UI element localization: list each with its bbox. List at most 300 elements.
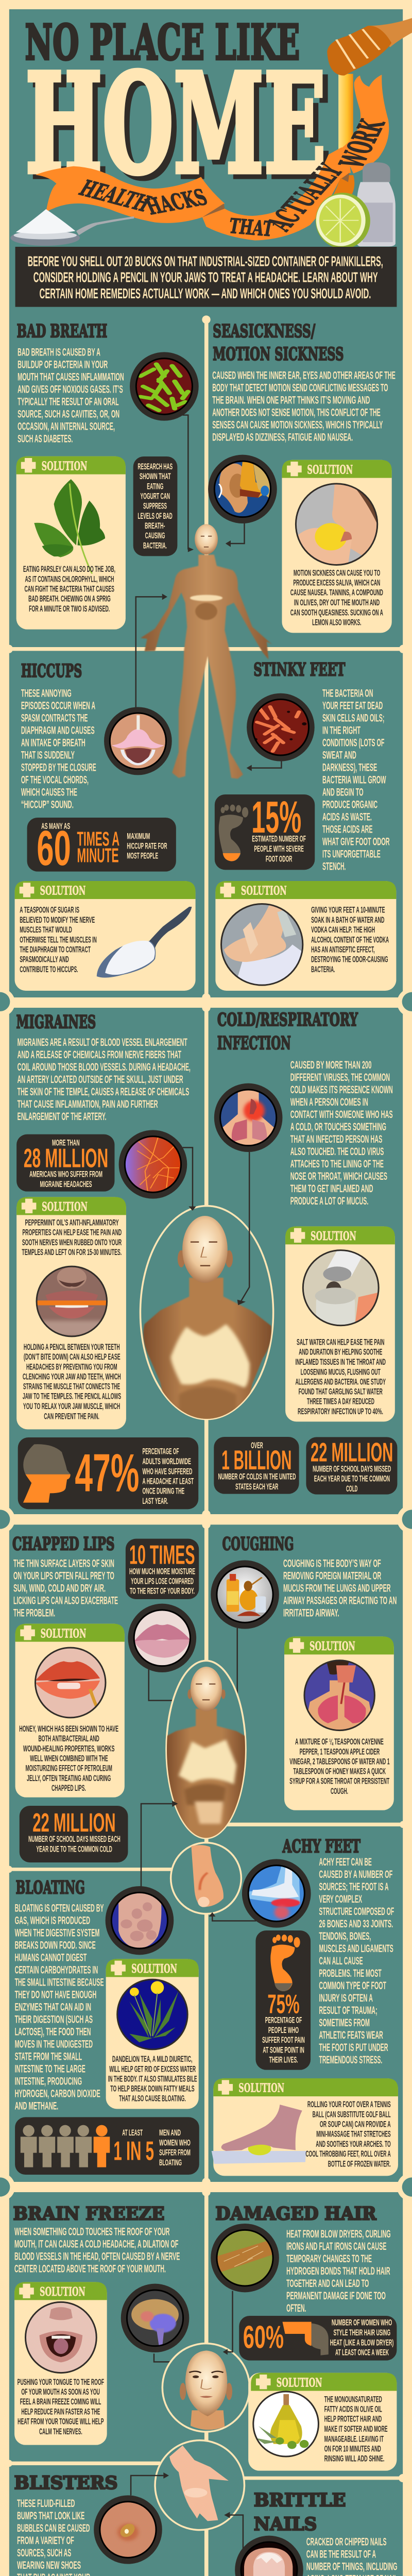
stat: 15 percent foot odor <box>215 792 315 870</box>
icon: diaphragm circle <box>104 707 172 775</box>
heading: cold/respiratory infection <box>217 1009 358 1054</box>
panel: bloating: BLOATING IS OFTEN CAUSED BY <box>15 1902 104 1914</box>
icon: damaged hair strand circle <box>211 2224 279 2292</box>
icon: brain circle <box>121 2284 189 2352</box>
photo: dandelion <box>117 1979 187 2049</box>
illustration: honey stream <box>334 74 354 194</box>
ribbon: health hacks that actually work <box>36 75 392 241</box>
body figure: head and torso with lungs <box>140 1206 273 1420</box>
panel: hiccups: HICCUPS <box>21 660 82 682</box>
panel: hiccups: HICCUP RATE FOR <box>127 841 167 851</box>
panel: migraines: WHO HAVE SUFFERED <box>143 1467 192 1476</box>
text: chapped lips causes <box>13 1557 118 1619</box>
photo: olive oil bottle <box>253 2392 318 2456</box>
heading: seasickness / motion sickness <box>213 321 344 365</box>
solution card: parsley: SOLUTION <box>42 459 87 473</box>
panel: chapped lips: JELLY, OFTEN TREATING AND CURING <box>27 1773 111 1783</box>
body figure: hand in circle <box>155 2441 244 2530</box>
stat: 60 percent: 60% <box>243 2319 284 2355</box>
stat: 22 million school days bottom <box>20 1806 128 1862</box>
text: salt water solution <box>295 1337 386 1416</box>
panel: brain freeze: FEEL A BRAIN FREEZE COMING WILL <box>20 2397 101 2406</box>
ribbon: health hacks that actually work: ACTUALLY <box>260 160 350 235</box>
panel: chapped lips: BOTH ANTIBACTERIAL AND <box>38 1734 99 1743</box>
section separators <box>0 645 412 2576</box>
connector arrow: cold to chest <box>237 1152 249 1305</box>
text: chapped lips causes: THE PROBLEM. <box>13 1606 55 1619</box>
panel: migraines: PERCENTAGE OF <box>143 1447 179 1456</box>
solution card: vodka foot soak <box>215 881 396 991</box>
stat: 22 million school days <box>306 1437 397 1495</box>
panel: bad breath: YOGURT CAN <box>140 492 170 501</box>
panel: coughing <box>211 1534 397 1810</box>
callout: yogurt research: BREATH- <box>145 521 165 531</box>
ribbon: health hacks that actually work: WORK <box>332 116 392 171</box>
stat: 1 billion: OVER <box>251 1440 263 1450</box>
panel: migraines: SOOTH NERVES WHEN RUBBED ONTO YOUR <box>22 1238 122 1247</box>
stat: 1 in 5: AT LEAST <box>122 2128 143 2138</box>
text: tongue solution: CALM THE NERVES. <box>39 2427 82 2436</box>
text: blisters causes <box>17 2497 91 2576</box>
text: tennis ball solution <box>305 2099 391 2168</box>
panel: migraines: AMERICANS WHO SUFFER FROM <box>29 1170 102 1179</box>
icon: hair dryer head <box>282 2322 329 2355</box>
panel: blisters: FROM A VARIETY OF <box>17 2534 74 2547</box>
panel: chapped lips: MOISTURIZING EFFECT OF PETROLEUM <box>25 1764 112 1773</box>
panel: bad breath: BACTERIA. <box>143 541 167 550</box>
text: coughing causes <box>283 1557 397 1619</box>
panel: bad breath: TYPICALLY THE RESULT OF AN ORAL <box>18 395 119 408</box>
panel: bloating: INTESTINE TO THE LARGE <box>15 2062 85 2075</box>
panel: bad breath: CAN FIGHT THE BACTERIA THAT CAUSES <box>24 584 114 594</box>
text: parsley solution <box>23 564 115 614</box>
icon: five people <box>21 2125 110 2167</box>
solution card: honey and petroleum jelly: SOLUTION <box>41 1626 86 1641</box>
panel: brain freeze: OF YOUR MOUTH AS SOON AS YOU <box>21 2387 100 2397</box>
text: stinky feet causes: STENCH. <box>322 860 346 872</box>
connector arrow: cough to chest <box>226 1628 237 1729</box>
callout: yogurt research <box>133 456 177 556</box>
solution card: sugar: CONTRIBUTE TO HICCUPS. <box>20 964 78 974</box>
text: honey solution <box>19 1724 118 1793</box>
stat: 1 in 5: BLOATING <box>159 2158 182 2167</box>
solution card: dandelion tea <box>106 1959 199 2109</box>
panel: cold and respiratory infection: STATES EACH YEAR <box>235 1482 278 1492</box>
panel: hiccups: SPASM CONTRACTS THE <box>21 711 88 724</box>
solution card: dandelion tea: SOLUTION <box>131 1961 177 1976</box>
connector arrow: ear to head <box>226 523 244 547</box>
panel: blisters: BUMPS THAT LOOK LIKE <box>17 2510 84 2522</box>
stat: 75 percent <box>255 1930 311 2070</box>
solution card: sugar <box>15 881 196 991</box>
stat: 75 percent: 75% <box>267 1989 300 2019</box>
panel: migraines: HEADACHES BY PREVENTING YOU FROM <box>26 1362 117 1371</box>
panel: bloating: WHEN THE DIGESTIVE SYSTEM <box>15 1926 99 1939</box>
panel: migraines: PEPPERMINT OIL’S ANTI-INFLAMMATORY <box>25 1218 119 1227</box>
panel: bloating: CERTAIN CARBOHYDRATES IN <box>15 1963 98 1976</box>
solution card: tennis ball: SOLUTION <box>238 2081 284 2095</box>
text: TO HELP BREAK DOWN FATTY MEALS <box>110 2084 195 2094</box>
text: brain freeze causes <box>14 2225 180 2275</box>
icon: nail circle <box>235 2536 303 2576</box>
panel: brain freeze: HELP REDUCE PAIN FASTER AS THE <box>21 2407 100 2416</box>
panel: chapped lips: WELL WHEN COMBINED WITH THE <box>30 1754 108 1763</box>
stat: 60 times a minute: TIMES A <box>77 828 119 850</box>
panel: chapped lips: SUN, WIND, COLD AND DRY AIR. <box>13 1582 106 1594</box>
solution card: sugar: A TEASPOON OF SUGAR IS <box>20 905 79 915</box>
timeline top node <box>202 315 211 324</box>
solution card: honey and petroleum jelly <box>15 1624 125 1798</box>
panel: bloating: THEY DO NOT HAVE ENOUGH <box>15 1988 96 2001</box>
heading: cold/respiratory infection: INFECTION <box>217 1033 291 1054</box>
heading: brittle nails <box>254 2490 346 2535</box>
stat: 60 times a minute: 60 <box>37 821 71 876</box>
panel: bloating: GAS, WHICH IS PRODUCED <box>15 1914 90 1926</box>
icon: footprint <box>219 805 248 861</box>
solution card: pencil: CAN PREVENT THE PAIN. <box>44 1412 99 1421</box>
text: YOUR LIPS LOSE COMPARED <box>131 1577 194 1586</box>
text: motion sickness causes <box>212 369 396 443</box>
heading: brittle nails: NAILS <box>254 2514 317 2535</box>
panel: chapped lips: ON YOUR LIPS OFTEN FALL PREY TO <box>13 1569 114 1582</box>
stat: 47 percent: LAST YEAR. <box>143 1496 168 1506</box>
photo: pencil between teeth <box>37 1266 107 1336</box>
panel: hiccups: THAT IS SUDDENLY <box>21 749 75 761</box>
connector arrow: bloating to abdomen <box>141 1801 178 1887</box>
text: dandelion solution <box>108 2054 197 2104</box>
text: 10 TIMES <box>129 1540 195 1570</box>
solution card: tongue: SOLUTION <box>40 2284 85 2299</box>
panel: migraines: ADULTS WORLDWIDE <box>143 1456 191 1466</box>
panel: bloating: THE SMALL INTESTINE BECAUSE <box>15 1976 104 1988</box>
icon: blood vessels circle <box>119 1130 187 1199</box>
text: stinky feet causes <box>322 687 390 872</box>
text: damaged hair causes: OFTEN. <box>286 2302 306 2314</box>
photo: foot soak <box>221 904 303 985</box>
stat: 1 in 5: 1 IN 5 <box>113 2136 154 2166</box>
stat: 1 in 5: MEN AND <box>159 2128 181 2138</box>
panel: bloating: MOVES IN THE UNDIGESTED <box>15 2038 93 2050</box>
illustration: salt shaker <box>357 162 396 246</box>
text: pencil solution <box>23 1342 121 1421</box>
panel: achy feet: SUFFER FOOT PAIN <box>262 2035 305 2045</box>
stat: 28 million <box>16 1134 114 1192</box>
connector arrow: bad breath to head <box>183 415 194 552</box>
ribbon: health hacks that actually work: HEALTH <box>75 175 156 216</box>
panel: bad breath: RESEARCH HAS <box>138 462 173 471</box>
title: no place like home <box>10 14 412 249</box>
text: hiccups causes <box>21 687 96 810</box>
text: peppermint oil <box>22 1218 122 1257</box>
panel: chapped lips: 22 MILLION <box>32 1808 115 1837</box>
solution card: sugar: MUSCLES THAT WOULD <box>20 925 72 935</box>
panel: bad breath: BAD BREATH. CHEWING ON A SPRIG <box>28 594 111 604</box>
panel: bloating: HYDROGEN, CARBON DIOXIDE <box>15 2087 100 2099</box>
intro banner <box>15 247 397 307</box>
icon: inner ear circle <box>208 455 277 523</box>
solution card: sugar: SOLUTION <box>40 884 85 898</box>
panel: bloating: STATE FROM THE SMALL <box>15 2050 82 2062</box>
panel: damaged hair <box>211 2204 397 2471</box>
panel: blisters <box>14 2472 196 2576</box>
panel: bad breath: MOUTH THAT CAUSES INFLAMMATION <box>18 370 124 383</box>
photo: honey on lips <box>35 1648 106 1718</box>
text: hiccups causes: “HICCUP” SOUND. <box>21 798 74 810</box>
panel: bad breath <box>16 321 199 630</box>
icon: cough remedy ingredients circle <box>211 1560 279 1629</box>
central timeline spine <box>204 319 209 2576</box>
solution card: lemon <box>282 460 392 633</box>
panel: hiccups: OF THE VOCAL CHORDS, <box>21 773 89 786</box>
panel: stinky feet: ESTIMATED NUMBER OF <box>252 834 306 844</box>
panel: hiccups: AN INTAKE OF BREATH <box>21 736 85 749</box>
panel: bad breath: EATING PARSLEY CAN ALSO DO THE JOB, <box>23 564 115 574</box>
panel: blisters: SOURCES, SUCH AS <box>17 2547 71 2559</box>
solution card: pencil: SOLUTION <box>42 1199 88 1214</box>
body figure: upper body with abdomen <box>166 1660 246 1839</box>
text: migraine causes <box>18 1036 191 1123</box>
text: vodka solution: BACTERIA. <box>311 964 335 974</box>
solution card: sugar: BELIEVED TO MODIFY THE NERVE <box>20 915 95 925</box>
connector arrow: blisters to hand <box>131 2472 169 2495</box>
panel: bad breath: SUPPRESS <box>143 501 167 511</box>
panel: migraines: 28 MILLION <box>24 1143 108 1173</box>
text: hiccups causes: THESE ANNOYING <box>21 687 72 699</box>
panel: bad breath: OCCASION, AN INTERNAL SOURCE, <box>18 420 115 432</box>
text: HOW MUCH MORE MOISTURE <box>129 1567 195 1576</box>
body figure: foot in circle <box>171 1843 241 1914</box>
panel: migraines: A HEADACHE AT LEAST <box>143 1477 194 1486</box>
stat: 10 times <box>126 1539 199 1599</box>
panel: migraines: MIGRAINES <box>16 1012 96 1032</box>
text: migraine causes: ENLARGEMENT OF THE ARTERY. <box>18 1110 107 1123</box>
solution card: sugar: THE DIAPHRAGM TO CONTRACT <box>20 945 91 955</box>
text: honey solution: CHAPPED LIPS. <box>52 1783 86 1793</box>
panel: bad breath: AND GIVES OFF NOXIOUS GASES. IT’S <box>18 383 123 395</box>
panel: achy feet: AT SOME POINT IN <box>263 2045 304 2055</box>
panel: chapped lips: YEAR DUE TO THE COMMON COLD <box>36 1844 112 1854</box>
photo: open mouth <box>25 2302 96 2373</box>
panel: bloating <box>15 1801 199 2175</box>
panel: bloating: BREAKS DOWN FOOD. SINCE <box>15 1939 96 1951</box>
icon: blister circle <box>94 2495 162 2564</box>
text: bloating causes: AND METHANE. <box>15 2099 58 2112</box>
stat: 1 in 5 <box>15 2117 199 2175</box>
stat: 60 times a minute: AS MANY AS <box>41 821 70 831</box>
connector arrow: nails to hand <box>224 2512 243 2562</box>
text: IN THE BODY. IT ALSO STIMULATES BILE <box>108 2074 197 2084</box>
panel: chapped lips: WOUND-HEALING PROPERTIES, WORKS <box>23 1744 114 1753</box>
panel: brain freeze: HEAT FROM YOUR TONGUE WILL HELP <box>18 2417 104 2427</box>
solution card: tongue <box>14 2282 107 2445</box>
panel: blisters: WEARING NEW SHOES <box>17 2559 81 2571</box>
panel: chapped lips: HONEY, WHICH HAS BEEN SHOWN TO HAVE <box>19 1724 118 1734</box>
text: brittle nails causes <box>306 2535 398 2576</box>
stat: 28 million: MORE THAN <box>52 1138 80 1148</box>
panel: bad breath: SOURCE, SUCH AS CAVITIES, OR, ON <box>18 408 119 420</box>
text: sugar solution <box>20 905 97 974</box>
panel: migraines: HOLDING A PENCIL BETWEEN YOUR TEETH <box>24 1342 120 1352</box>
panel: bloating: LACTOSE), THE FOOD THEN <box>15 2025 91 2038</box>
solution card: olive oil: SOLUTION <box>277 2376 322 2390</box>
icon: bacteria circle <box>130 352 199 421</box>
panel: cold and respiratory infection <box>214 1009 397 1495</box>
heading: brittle nails: BRITTLE <box>254 2490 346 2511</box>
panel: migraines: MIGRAINE HEADACHES <box>40 1179 92 1189</box>
text: bad breath causes <box>18 346 124 445</box>
panel: chapped lips: NUMBER OF SCHOOL DAYS MISSED EACH <box>28 1834 121 1844</box>
text: damaged hair causes <box>286 2228 391 2314</box>
panel: coughing: COUGHING <box>222 1534 294 1554</box>
text: cold causes <box>290 1059 393 1207</box>
panel: migraines: TEMPLES AND LEFT ON FOR 15-30 MINUTES. <box>22 1247 122 1257</box>
panel: bloating: HUMANS CANNOT DIGEST <box>15 1951 87 1963</box>
panel: migraines: STRAINS THE MUSCLE THAT CONNECTS THE <box>23 1382 120 1392</box>
panel: stinky feet <box>215 659 396 991</box>
panel: achy feet: PERCENTAGE OF <box>265 2015 302 2025</box>
stat: 47 percent: 47% <box>75 1443 139 1503</box>
panel: migraines: ONCE DURING THE <box>143 1486 184 1496</box>
stat: 60 times a minute: MOST PEOPLE <box>127 851 158 861</box>
connector arrow: hair to head <box>223 2291 233 2355</box>
body figure: head in circle <box>162 2344 250 2432</box>
panel: brain freeze <box>13 2204 189 2445</box>
panel: migraines <box>16 1012 273 1509</box>
text: sugar solution: SPASMODICALLY AND <box>20 955 69 964</box>
illustration: spoon of salt <box>10 209 134 246</box>
connector arrow: stinky feet to foot <box>247 761 281 771</box>
panel: seasickness and motion sickness <box>208 321 396 633</box>
panel: bad breath: BAD BREATH IS CAUSED BY A <box>18 346 100 358</box>
callout: yogurt research: EATING <box>147 482 163 491</box>
connector arrow: lips to mouth <box>149 1669 190 1704</box>
panel: migraines: PROPERTIES CAN HELP EASE THE PAIN AND <box>22 1228 122 1238</box>
text: achy feet causes <box>319 1856 394 2066</box>
text: cayenne solution: COUGH. <box>331 1786 348 1796</box>
panel: hiccups: DIAPHRAGM AND CAUSES <box>21 724 95 736</box>
panel: achy feet: PEOPLE WHO <box>268 2025 299 2035</box>
stat: 1 billion <box>214 1437 299 1494</box>
panel: chapped lips: CHAPPED LIPS <box>12 1534 114 1554</box>
illustration: honey dipper <box>327 18 412 76</box>
stat: 15 percent foot odor: FOOT ODOR <box>266 854 293 863</box>
illustration: lime half <box>316 193 370 249</box>
text: bloating causes <box>15 1902 104 2112</box>
text: cayenne solution <box>289 1737 390 1796</box>
callout: yogurt research: CAUSING <box>145 531 165 540</box>
panel: bad breath: FOR A MINUTE OR TWO IS ADVISED. <box>29 604 110 614</box>
panel: blisters: THESE FLUID-FILLED <box>17 2497 75 2510</box>
photo: person sucking lemon <box>296 484 377 565</box>
solution card: olive oil <box>248 2373 397 2471</box>
text: TO THE REST OF YOUR BODY. <box>130 1586 195 1596</box>
panel: bad breath: LEVELS OF BAD <box>138 511 173 521</box>
icon: orange footprint <box>270 1935 300 1991</box>
panel: stinky feet: PEOPLE WITH SEVERE <box>254 844 304 854</box>
stat: 60 times a minute: MINUTE <box>77 844 119 867</box>
panel: migraines: (DON’T BITE DOWN) CAN ALSO HELP EASE <box>24 1352 121 1362</box>
text: tongue solution <box>18 2377 104 2436</box>
text: SUFFER FROM <box>159 2148 191 2158</box>
panel: bloating: THEIR DIGESTION (SUCH AS <box>15 2013 93 2025</box>
icon: foot bones circle <box>242 1859 311 1928</box>
icon: chapped lips circle <box>128 1604 196 1672</box>
solution card: tennis ball <box>212 2078 398 2176</box>
text: WOMEN WHO <box>159 2138 191 2147</box>
stat: 60 times a minute: MAXIMUM <box>127 832 150 841</box>
illustration: parsley leaf <box>34 479 105 573</box>
icon: lungs circle <box>214 1083 282 1152</box>
panel: bad breath: AS IT CONTAINS CHLOROPHYLL, WHICH <box>25 574 114 584</box>
ribbon: health hacks that actually work: THAT <box>227 214 276 241</box>
panel: hiccups <box>15 594 196 991</box>
heading: blisters: BLISTERS <box>14 2472 118 2494</box>
illustration: spoon of sugar <box>97 907 192 978</box>
panel: chapped lips: LICKING LIPS CAN ALSO EXACERBATE <box>13 1594 118 1606</box>
connector arrow: brain to head <box>154 2353 182 2365</box>
stat: 60 percent <box>239 2316 397 2361</box>
panel: migraines: CLENCHING YOUR JAW AND TEETH, WHICH <box>23 1372 121 1381</box>
panel: bloating: BLOATING <box>16 1877 85 1898</box>
panel: bloating: ENZYMES THAT CAN AID IN <box>15 2001 91 2013</box>
panel: blisters: BUBBLES CAN BE CAUSED <box>17 2522 90 2534</box>
panel: migraines: YOU TO RELAX YOUR JAW MUSCLE, WHICH <box>23 1401 120 1411</box>
text: vodka solution <box>311 905 389 974</box>
icon: head silhouette <box>23 1444 71 1503</box>
text: DANDELION TEA, A MILD DIURETIC, <box>112 2054 192 2064</box>
connector arrow: migraines to head <box>183 1147 196 1211</box>
panel: achy feet: THEIR LIVES. <box>269 2055 298 2064</box>
text: bad breath causes: SUCH AS DIABETES. <box>18 432 73 445</box>
stat: 22 million school days: COLD <box>346 1484 357 1494</box>
connector arrow: achy feet to foot <box>209 1912 256 1921</box>
text: lemon solution <box>290 568 383 627</box>
panel: bloating: INTESTINE, PRODUCING <box>15 2075 82 2087</box>
panel: hiccups: WHICH CAUSES THE <box>21 786 77 798</box>
body figure: full man <box>141 524 272 779</box>
text: olive oil solution <box>324 2395 388 2464</box>
solution card: sugar: OTHERWISE TELL THE MUSCLES IN <box>20 935 97 944</box>
panel: hiccups: STOPPED BY THE CLOSURE <box>21 761 96 773</box>
edge notches <box>0 992 412 2576</box>
heading: brain freeze: BRAIN FREEZE <box>13 2204 164 2224</box>
solution card: cayenne syrup <box>284 1636 394 1810</box>
panel: hiccups: EPISODES OCCUR WHEN A <box>21 699 95 711</box>
panel: chapped lips: THE THIN SURFACE LAYERS OF SKIN <box>13 1557 114 1569</box>
icon: foot bacteria circle <box>247 693 315 761</box>
panel: bad breath: SHOWN THAT <box>140 471 171 481</box>
connector arrow: hiccups to diaphragm <box>136 594 167 707</box>
panel: stinky feet: 15% <box>251 792 301 842</box>
stat: 47 percent <box>18 1437 198 1509</box>
text: WILL HELP GET RID OF EXCESS WATER <box>109 2064 196 2074</box>
panel: chapped lips <box>12 1534 199 1862</box>
ribbon: health hacks that actually work: HACKS <box>142 184 211 219</box>
solution card: vodka foot soak: SOLUTION <box>241 884 287 898</box>
panel: achy feet <box>171 1836 398 2176</box>
text: THAT ALSO CAUSE BLOATING. <box>119 2094 186 2104</box>
panel: brain freeze: PUSHING YOUR TONGUE TO THE ROOF <box>18 2377 104 2387</box>
panel: brittle nails <box>221 2490 398 2576</box>
solution card: parsley <box>16 456 126 630</box>
panel: bad breath: BUILDUP OF BACTERIA IN YOUR <box>18 358 108 370</box>
icon: intestines circle <box>106 1886 174 1955</box>
solution card: salt water <box>285 1226 395 1421</box>
solution card: pencil <box>16 1197 126 1429</box>
photo: salt into glass <box>303 1250 379 1327</box>
photo: throat and lungs <box>304 1660 374 1731</box>
panel: migraines: JAW TO THE TEMPLES. THE PENCIL ALLOWS <box>23 1392 121 1401</box>
